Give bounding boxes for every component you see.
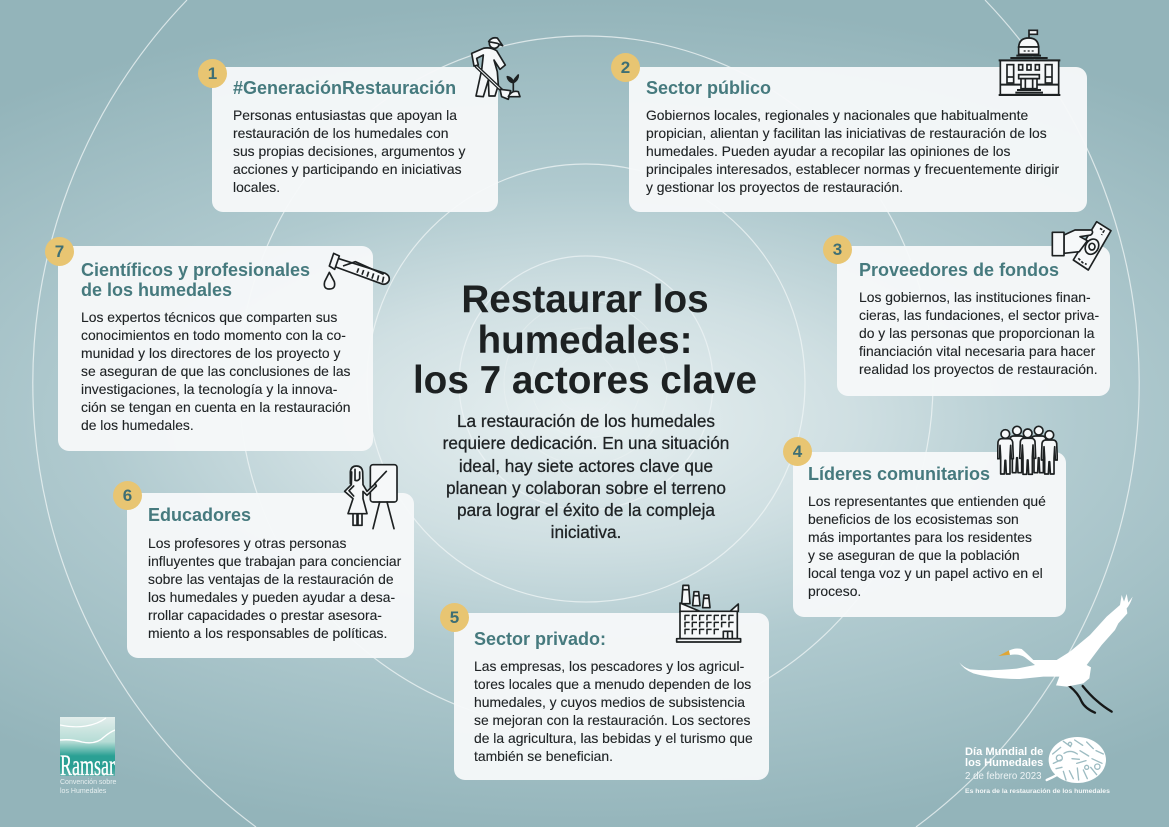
text 6 [148,535,402,641]
logo text [965,746,1043,768]
text 1: sus propias decisiones, argumentos y [233,143,465,159]
heading 7: Científicos y profesionales [81,260,310,280]
panel: 6 Educadores [127,493,414,658]
logo text: los Humedales [965,756,1043,768]
intro text: requiere dedicación. En una situación [443,433,729,453]
icon: test tube and drop [324,252,390,290]
text 7: investigaciones, la tecnología y la innova- [81,381,337,397]
text 4: beneficios de los ecosistemas son [808,511,1019,527]
title [413,278,757,402]
logo mark with waves [60,717,115,776]
text 4: local tenga voz y un papel activo en el [808,565,1043,581]
panel: 2 Sector público [629,67,1087,212]
panel: 4 Líderes comunitarios [793,452,1066,617]
text 5: se mejoran con la restauración. Los sectores [474,712,750,728]
badge 2 [611,53,640,82]
text 6: Los profesores y otras personas [148,535,346,551]
badge 1: 1 [208,64,217,83]
badge 7 [45,237,74,266]
logo: Día Mundial de los Humedales [965,737,1110,795]
text 3: cieras, las fundaciones, el sector priva- [859,307,1099,323]
text 5: humedales, y cuyos medios de subsistencia [474,694,745,710]
intro text [443,411,729,542]
logo text: Día Mundial de [965,746,1043,758]
logo caption: Convención sobre [60,779,116,786]
text 2: principales interesados, establecer normas y frecuentemente dirigir [646,161,1059,177]
text 4: Los representantes que entienden qué [808,493,1046,509]
logo caption [60,778,116,795]
heading 1: #GeneraciónRestauración [233,78,456,98]
badge 4 [783,437,812,466]
text 5: de la agricultura, las bebidas y el turismo que [474,730,753,746]
heading 2: Sector público [646,78,771,98]
text 7: munidad y los directores de los proyecto y [81,345,340,361]
text 1: Personas entusiastas que apoyan la [233,107,457,123]
badge 1 [198,59,227,88]
badge 5: 5 [450,608,459,627]
title: humedales: [478,318,692,362]
icon: government building [998,30,1060,96]
text 6: los humedales y pueden ayudar a desa- [148,589,395,605]
text 3: financiación vital necesaria para hacer [859,343,1095,359]
text 6: influyentes que trabajan para concienciar [148,553,401,569]
text 6: sobre las ventajas de la restauración de [148,571,394,587]
badge 3: 3 [833,240,842,259]
text 2: humedales. Pueden ayudar a recopilar las opiniones de los [646,143,1010,159]
badge 6 [113,481,142,510]
text 5: también se benefician. [474,748,613,764]
text 7: conocimientos en todo momento con la co- [81,327,346,343]
panel: 3 Proveedores de fondos [837,246,1110,396]
icon: flying egret [960,594,1132,714]
heading 4: Líderes comunitarios [808,464,990,484]
text 1: locales. [233,179,280,195]
text 2: propician, alientan y facilitan las iniciativas de restauración de los [646,125,1047,141]
badge 2: 2 [621,58,630,77]
text 3: realidad los proyectos de restauración. [859,361,1098,377]
heading 5: Sector privado: [474,629,606,649]
heading 7: de los humedales [81,280,232,300]
icon: factory [676,584,742,643]
text 2 [646,107,1059,195]
intro text: planean y colaboran sobre el terreno [446,478,726,498]
text 2: Gobiernos locales, regionales y nacionales que habitualmente [646,107,1028,123]
badge 5 [440,603,469,632]
title: Restaurar los [461,278,709,321]
logo tagline: Es hora de la restauración de los humedales [965,788,1110,795]
text 3: do y las personas que proporcionan la [859,325,1095,341]
icon: teacher with board [344,464,398,530]
badge 3 [823,235,852,264]
logo: Ramsar [60,717,116,795]
logo wordmark: Ramsar [60,749,115,782]
text 7: Los expertos técnicos que comparten sus [81,309,337,325]
badge 7: 7 [55,242,64,261]
text 1 [233,107,466,195]
heading 7 [81,260,310,300]
heading 6: Educadores [148,505,251,525]
intro text: La restauración de los humedales [457,411,715,431]
text 7: ción se tengan en cuenta en la restauración [81,399,351,415]
badge 4: 4 [793,442,802,461]
text 4: y se aseguran de que la población [808,547,1020,563]
text 7 [81,309,351,433]
text 3: Los gobiernos, las instituciones finan- [859,289,1091,305]
heading 3: Proveedores de fondos [859,260,1059,280]
text 7: se aseguran de que las conclusiones de las [81,363,351,379]
intro text: ideal, hay siete actores clave que [459,456,713,476]
logo date: 2 de febrero 2023 [965,771,1041,782]
icon: group of people [997,426,1058,476]
text 5: Las empresas, los pescadores y los agricul- [474,658,744,674]
icon: person with shovel [470,36,521,100]
text 4: proceso. [808,583,861,599]
title: los 7 actores clave [413,359,757,402]
panel: 1 Generación Restauración [212,67,498,212]
logo caption: los Humedales [60,788,106,795]
text 6: miento a los responsables de políticas. [148,625,387,641]
icon: hand with money [1052,220,1112,271]
badge 6: 6 [123,486,132,505]
text 4: más importantes para los residentes [808,529,1032,545]
text 3 [859,289,1099,377]
text 4 [808,493,1046,599]
panel: 7 Científicos [58,246,373,451]
text 7: de los humedales. [81,417,194,433]
text 5 [474,658,753,764]
text 6: rrollar capacidades o prestar asesora- [148,607,382,623]
panel: 5 Sector privado [454,613,769,780]
intro text: iniciativa. [551,522,621,542]
intro text: para lograr el éxito de la compleja [457,500,715,520]
text 5: tores locales que a menudo dependen de los [474,676,751,692]
logo emblem [1046,737,1106,783]
text 2: y gestionar los proyectos de restauración. [646,179,903,195]
text 1: restauración de los humedales con [233,125,448,141]
text 1: acciones y participando en iniciativas [233,161,462,177]
